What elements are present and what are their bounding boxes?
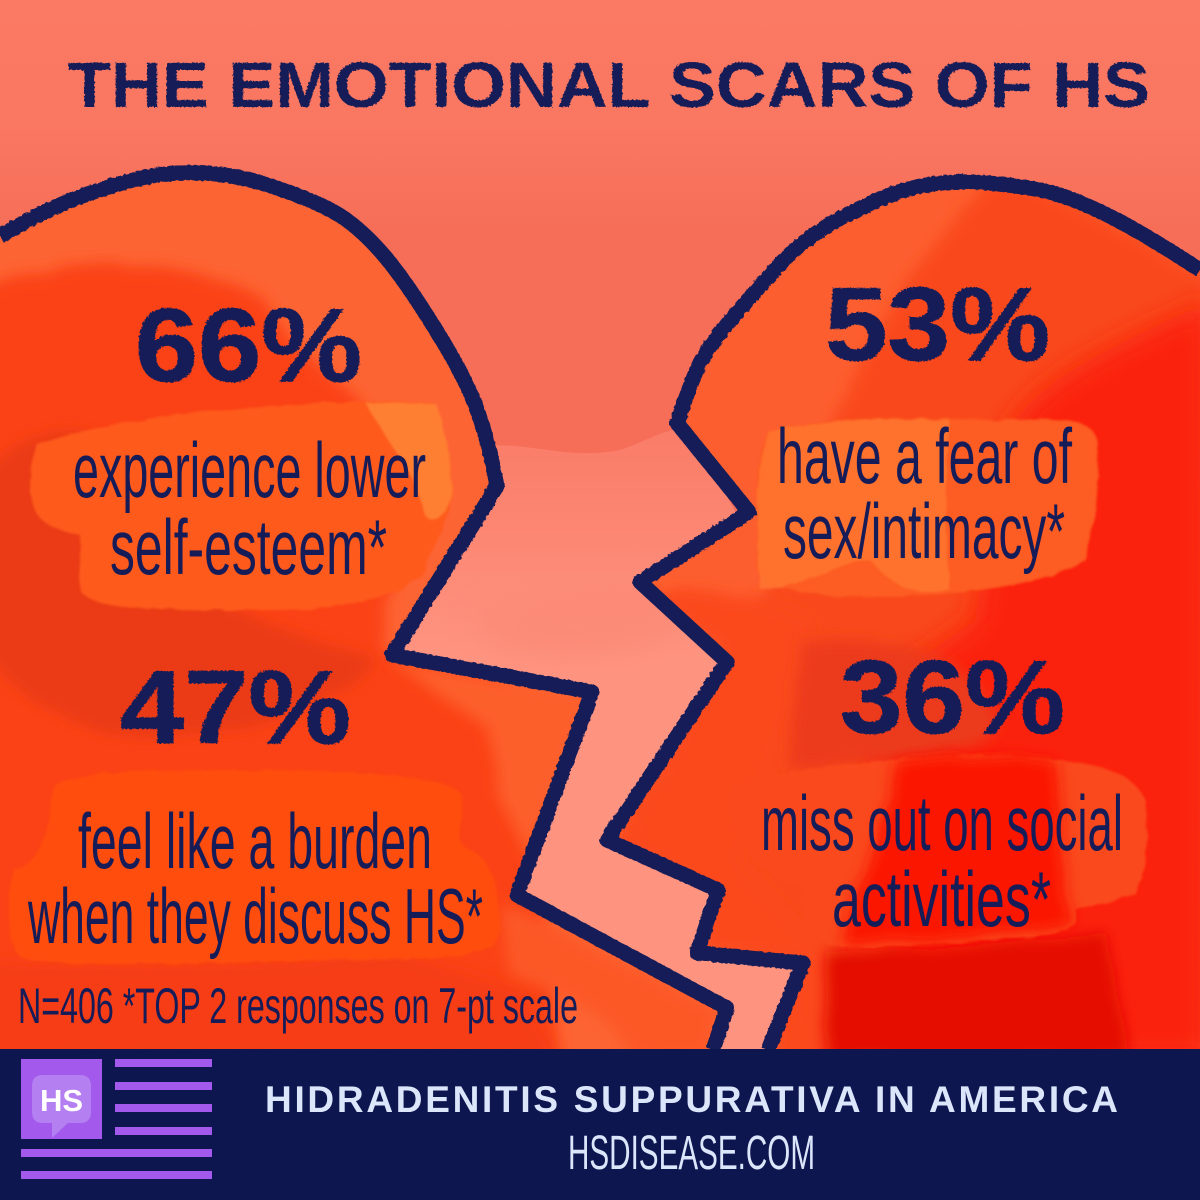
highlight: 53% text patch — [757, 418, 1098, 597]
footer band — [0, 1049, 1200, 1200]
stat: 47% feel like a burden: 47% — [120, 650, 351, 766]
stat: 66% lower self-esteem — [73, 288, 426, 591]
logo: HS flag — [21, 1059, 212, 1179]
footnote: N=406 *TOP 2 responses on 7-pt scale — [18, 978, 578, 1034]
stat: 47% feel like a burden — [27, 650, 483, 960]
stat: 66% lower self-esteem: 66% — [135, 288, 362, 404]
stat: 53% fear of intimacy — [777, 267, 1072, 575]
footer website: HSDISEASE.COM — [568, 1127, 815, 1180]
logo: HS flag: HS — [40, 1083, 83, 1118]
stat: 36% miss social activities — [761, 640, 1123, 943]
stat: 66% lower self-esteem: experience lower — [73, 426, 426, 514]
title: THE EMOTIONAL SCARS OF HS — [68, 49, 1150, 121]
panel: left head shape — [0, 150, 760, 1060]
stat: 36% miss social activities: 36% — [840, 640, 1065, 756]
panel: right head shape — [600, 170, 1200, 1060]
stat: 66% lower self-esteem: self-esteem* — [110, 503, 387, 591]
stat: 47% feel like a burden: feel like a burden — [78, 797, 432, 885]
stat: 36% miss social activities: activities* — [832, 855, 1051, 943]
highlight: 36% text patch — [834, 754, 1149, 948]
stat: 47% feel like a burden: when they discuss HS* — [27, 872, 483, 960]
footer heading: HIDRADENITIS SUPPURATIVA IN AMERICA — [265, 1079, 1118, 1120]
highlight: 47% text patch — [8, 770, 500, 964]
highlight: 66% text patch — [30, 401, 451, 610]
stat: 53% fear of intimacy: 53% — [825, 267, 1050, 383]
